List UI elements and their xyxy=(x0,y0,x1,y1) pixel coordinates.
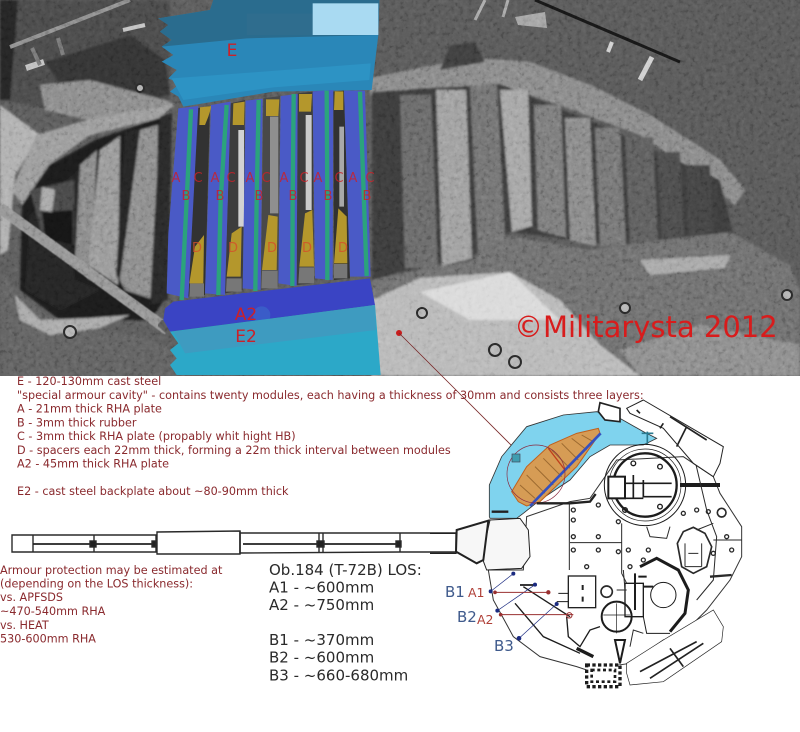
section labels xyxy=(445,583,514,655)
text block: armour layers: D - spacers each 22mm thick, forming a 22m thick interval between modules xyxy=(17,444,451,457)
photo labels xyxy=(172,41,375,347)
layer E2: backplate xyxy=(170,305,381,375)
label A1: A1 xyxy=(468,585,485,600)
watermark: ©Militarysta 2012 xyxy=(514,310,778,344)
special armour insert xyxy=(507,428,653,506)
B section lines xyxy=(489,572,558,640)
hatch: small cupola xyxy=(602,602,632,633)
top-left bar xyxy=(10,0,130,47)
equipment box xyxy=(568,576,596,608)
text block: LOS values: A1 - ~600mm xyxy=(269,579,374,597)
layer letters: C xyxy=(261,171,271,186)
layer letters: A xyxy=(349,171,358,186)
text block: armour layers: B - 3mm thick rubber xyxy=(17,416,137,430)
cyan cast armour xyxy=(489,412,657,518)
A section lines xyxy=(494,591,573,618)
label B1: B1 xyxy=(445,583,465,601)
layer letters: B xyxy=(289,189,297,204)
label A2: A2 xyxy=(235,305,257,325)
layer letters: C xyxy=(365,171,375,186)
layer letters: D xyxy=(192,241,202,256)
label A2: A2 xyxy=(477,612,494,627)
gaps between modules xyxy=(188,91,350,297)
layer letters: B xyxy=(182,189,190,204)
layer letters: A xyxy=(172,171,181,186)
label B2: B2 xyxy=(457,608,477,626)
text block: armour protection estimate: Armour protection may be estimated at xyxy=(0,564,223,577)
layer letters: A xyxy=(314,171,323,186)
layer letters: B xyxy=(216,189,224,204)
text block: armour layers xyxy=(17,375,644,498)
text block: LOS values: Ob.184 (T-72B) LOS: xyxy=(269,561,422,579)
mantlet xyxy=(430,518,530,570)
text block: armour protection estimate: (depending on the LOS thickness): xyxy=(0,578,193,591)
text block: armour layers: "special armour cavity" - contains twenty modules, each having a thickness of 30mm and consists three layers: xyxy=(17,389,644,402)
armour joint xyxy=(537,494,596,503)
layer letters: D xyxy=(338,241,348,256)
left opening xyxy=(20,115,168,320)
text block: armour layers: E2 - cast steel backplate about ~80-90mm thick xyxy=(17,485,289,498)
layer A2: plate xyxy=(163,278,375,332)
layer B: rubber xyxy=(182,91,367,300)
photo: turret armour cavity xyxy=(0,0,800,376)
layer letters: A xyxy=(246,171,255,186)
hatch: commander xyxy=(604,444,720,526)
bolts xyxy=(64,84,792,368)
layer letters: C xyxy=(226,171,236,186)
label E2: E2 xyxy=(235,327,257,347)
layer letters: C xyxy=(193,171,203,186)
layer letters: C xyxy=(299,171,309,186)
hatch: gunner xyxy=(625,558,688,633)
text block: armour layers: C - 3mm thick RHA plate (propably whit hight HB) xyxy=(17,430,296,443)
grain xyxy=(0,0,800,376)
text block: armour protection estimate: vs. APFSDS xyxy=(0,591,63,604)
plates and rivets xyxy=(569,453,742,647)
text block: armour layers: A2 - 45mm thick RHA plate xyxy=(17,458,169,471)
layer letters: B xyxy=(324,189,332,204)
layer letters: D xyxy=(267,241,277,256)
text block: armour protection estimate: ~470-540mm RHA xyxy=(0,605,106,618)
layer letters: A xyxy=(211,171,220,186)
layer letters xyxy=(172,171,375,256)
armour modules: right side xyxy=(372,84,735,280)
gun barrel xyxy=(12,531,456,554)
turret top-view drawing xyxy=(430,400,742,687)
callout line xyxy=(396,330,515,449)
top-right bar xyxy=(535,0,680,62)
overlay: colored armour layers xyxy=(158,0,381,375)
layer letters: B xyxy=(255,189,263,204)
turret outline xyxy=(488,457,742,670)
text block: armour layers: A - 21mm thick RHA plate xyxy=(17,403,162,416)
layer letters: C xyxy=(334,171,344,186)
lower left casting xyxy=(14,290,96,336)
layer letters: B xyxy=(363,189,371,204)
bottom rear details xyxy=(515,585,625,687)
layer letters: A xyxy=(280,171,289,186)
gun rod xyxy=(0,208,168,330)
text block: armour protection estimate xyxy=(0,564,223,646)
layer D: spacers xyxy=(189,91,347,283)
layer E: upper cast steel xyxy=(158,0,379,107)
text block: armour layers: E - 120-130mm cast steel xyxy=(17,375,161,388)
lower right casting xyxy=(372,232,800,376)
label B3: B3 xyxy=(494,637,514,655)
text block: LOS values: B3 - ~660-680mm xyxy=(269,667,408,685)
text block: LOS values: B2 - ~600mm xyxy=(269,649,374,667)
layer A: plates xyxy=(167,90,371,298)
layer letters: D xyxy=(302,241,312,256)
text block: armour protection estimate: 530-600mm RHA xyxy=(0,633,96,646)
text block: LOS values: B1 - ~370mm xyxy=(269,631,374,649)
text block: LOS values: A2 - ~750mm xyxy=(269,596,374,614)
stowage boxes xyxy=(598,400,723,685)
upper-left casting xyxy=(0,0,170,110)
label E: E xyxy=(227,41,237,61)
layer letters: D xyxy=(228,241,238,256)
text block: LOS values xyxy=(269,561,422,685)
text block: armour protection estimate: vs. HEAT xyxy=(0,619,49,632)
upper-right casting xyxy=(370,0,800,376)
